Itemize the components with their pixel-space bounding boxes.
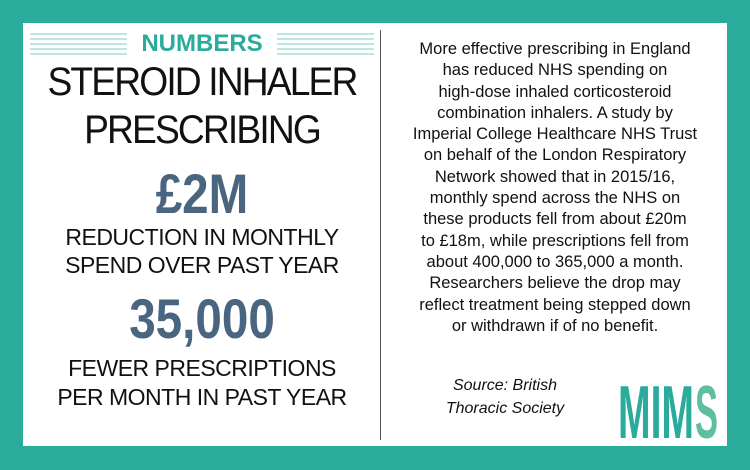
body text: combination inhalers. A study by — [437, 104, 673, 122]
stat label 1: SPEND OVER PAST YEAR — [65, 252, 339, 278]
source — [446, 377, 565, 417]
source: Thoracic Society — [446, 400, 564, 417]
divider — [380, 30, 381, 440]
body text: to £18m, while prescriptions fell from — [421, 232, 689, 250]
body text: on behalf of the London Respiratory — [424, 146, 686, 164]
body text: these products fell from about £20m — [423, 210, 687, 228]
body text: monthly spend across the NHS on — [430, 189, 680, 207]
source: Source: British — [453, 377, 557, 394]
stat label 2 — [57, 355, 347, 410]
body text: More effective prescribing in England — [419, 40, 691, 58]
title: PRESCRIBING — [84, 108, 320, 152]
body text: reflect treatment being stepped down — [419, 296, 691, 314]
body text: about 400,000 to 365,000 a month. — [427, 253, 683, 271]
stat label 1 — [65, 224, 339, 278]
stat: £2M: £2M — [156, 162, 248, 225]
title — [47, 60, 357, 152]
body text: Researchers believe the drop may — [429, 274, 681, 292]
stat label 2: PER MONTH IN PAST YEAR — [57, 384, 347, 410]
stat label 2: FEWER PRESCRIPTIONS — [68, 355, 336, 381]
body text — [413, 40, 697, 335]
heading: numbers banner: NUMBERS — [141, 30, 263, 57]
title: STEROID INHALER — [47, 60, 357, 104]
body text: Imperial College Healthcare NHS Trust — [413, 125, 697, 143]
stat label 1: REDUCTION IN MONTHLY — [65, 224, 339, 250]
stat: 35,000: 35,000 — [129, 287, 275, 350]
body text: has reduced NHS spending on — [443, 61, 667, 79]
body text: Network showed that in 2015/16, — [435, 168, 675, 186]
body text: high-dose inhaled corticosteroid — [438, 83, 671, 101]
body text: or withdrawn if of no benefit. — [452, 317, 658, 335]
